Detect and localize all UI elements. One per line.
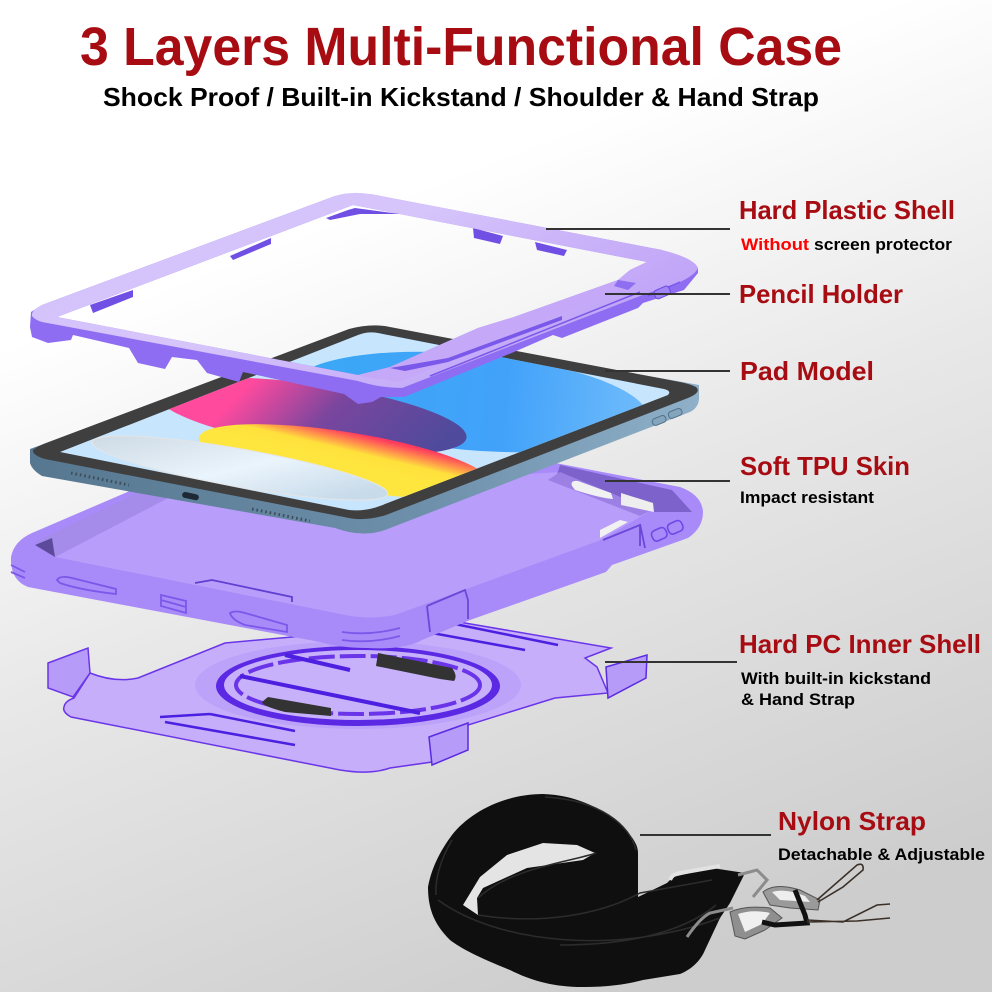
wallpaper yellow [198,424,477,497]
label: hard pc inner shell: With built-in kickstand [741,670,931,688]
label: nylon strap [778,806,985,864]
icon: metal clasps [670,866,820,939]
right clip [606,655,647,698]
wallpaper pink [169,378,467,452]
pad model [30,320,710,534]
label: pencil holder: Pencil Holder [739,279,903,309]
front clip [429,723,468,765]
inner wall [556,465,692,512]
inner tabs [90,208,567,313]
label: hard plastic shell [739,195,955,254]
inner floor [55,472,652,618]
subtitle: Shock Proof / Built-in Kickstand / Shoulder & Hand Strap [103,82,819,112]
pad edge [30,326,699,534]
label: nylon strap: Detachable & Adjustable [778,846,985,864]
label: hard pc inner shell: Hard PC Inner Shell [739,629,981,659]
callout lines [546,229,771,835]
hard plastic shell [30,193,698,404]
rim [11,460,703,648]
pad bezel [33,325,698,519]
wallpaper blue [314,352,642,452]
black grips [376,653,456,681]
usb port [182,491,199,501]
port cutouts [572,481,613,499]
icon: lanyard loops [807,864,890,922]
side buttons [650,519,684,542]
label: hard pc inner shell: & Hand Strap [741,691,855,709]
label: soft tpu skin [740,451,910,507]
pad buttons [651,408,683,426]
wallpaper white [92,436,388,500]
label: soft tpu skin: Impact resistant [740,489,875,507]
label: hard plastic shell: Without [741,236,810,254]
nylon strap [428,794,890,987]
rotating ring [195,641,521,729]
speakers [71,473,310,521]
shell plate [64,622,611,772]
left clip [48,648,90,697]
shell top face [32,193,698,388]
pencil holder [358,280,680,382]
label: pad model: Pad Model [740,356,874,386]
plate slots [160,622,558,745]
label: hard plastic shell: screen protector [814,236,953,254]
front details [11,524,645,641]
soft tpu skin [11,460,703,648]
label: soft tpu skin: Soft TPU Skin [740,451,910,481]
title: 3 Layers Multi-Functional Case [80,17,842,77]
underside [30,194,698,404]
label: hard plastic shell: Hard Plastic Shell [739,195,955,225]
label: nylon strap: Nylon Strap [778,806,926,836]
hard pc inner shell [48,622,647,772]
label: hard pc inner shell [739,629,981,709]
screen [60,332,670,510]
